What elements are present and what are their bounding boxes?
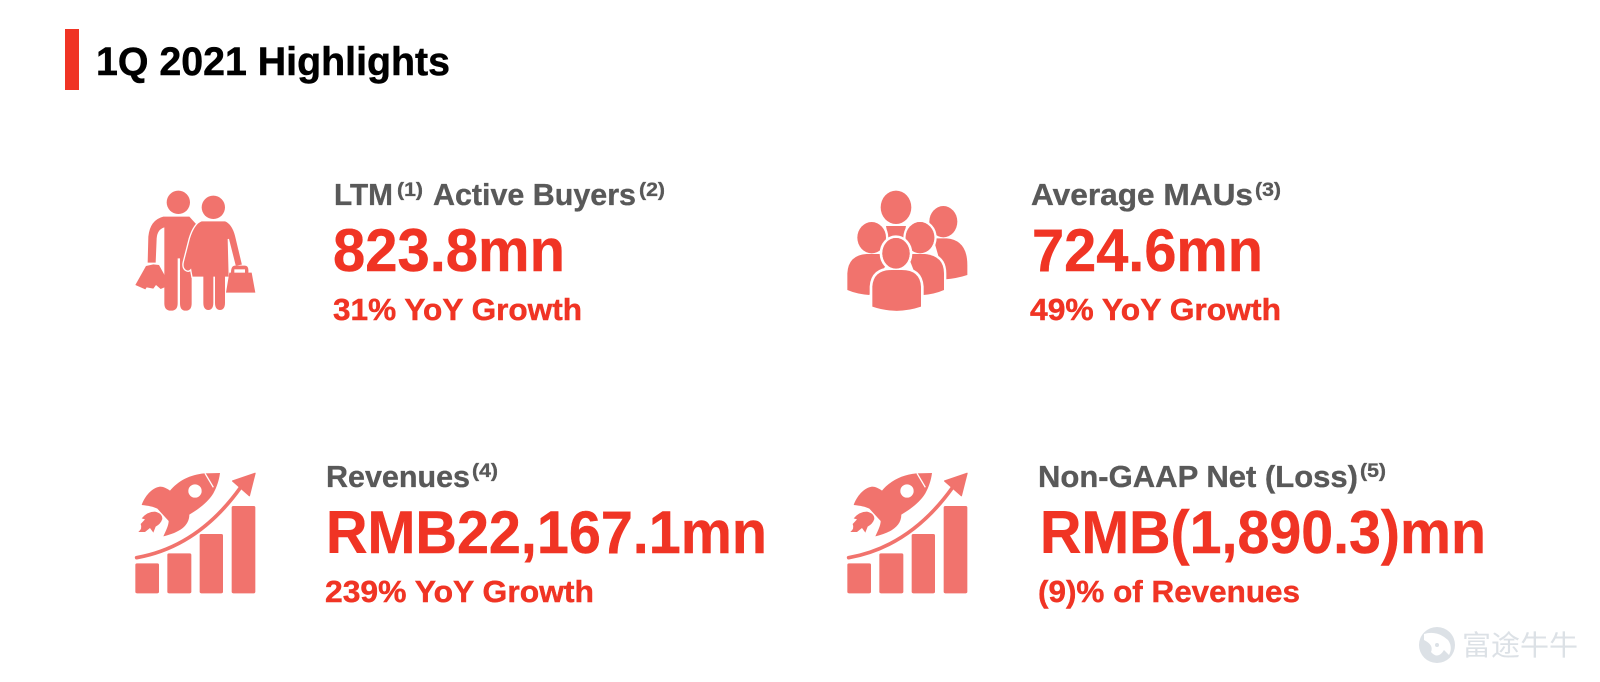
growth: 49% YoY Growth [1030, 292, 1281, 327]
label: LTM [334, 177, 393, 212]
growth: 31% YoY Growth [333, 292, 582, 327]
title: 1Q 2021 Highlights [96, 40, 450, 84]
label: (4) [472, 461, 498, 482]
watermark [1419, 624, 1578, 664]
icon: user group [847, 191, 967, 311]
icon: shoppers couple [135, 191, 255, 311]
stat: non-GAAP net loss [1038, 459, 1486, 609]
watermark logo [1419, 627, 1455, 663]
label [334, 177, 665, 212]
label: Revenues [326, 459, 470, 494]
label: Non-GAAP Net (Loss) [1038, 459, 1358, 494]
label: Active Buyers [433, 177, 636, 212]
value: RMB22,167.1mn [326, 499, 767, 566]
stat: revenues [325, 459, 767, 609]
stat: average MAUs [1030, 177, 1281, 327]
label: Average MAUs [1031, 177, 1253, 212]
icon: rocket and rising bars (net loss) [847, 473, 967, 593]
value: RMB(1,890.3)mn [1040, 499, 1486, 566]
heading accent bar [65, 29, 79, 90]
stat: LTM active buyers [333, 177, 665, 327]
icon: rocket and rising bars (revenues) [135, 473, 255, 593]
label: (5) [1360, 461, 1386, 482]
label: (3) [1255, 180, 1281, 201]
value: 724.6mn [1032, 217, 1263, 284]
growth: 239% YoY Growth [325, 574, 594, 609]
percent of revenues: (9)% of Revenues [1038, 574, 1300, 609]
watermark text: 富途牛牛 [1462, 624, 1578, 664]
label: (2) [639, 180, 665, 201]
label: (1) [397, 180, 423, 201]
value: 823.8mn [333, 217, 565, 284]
